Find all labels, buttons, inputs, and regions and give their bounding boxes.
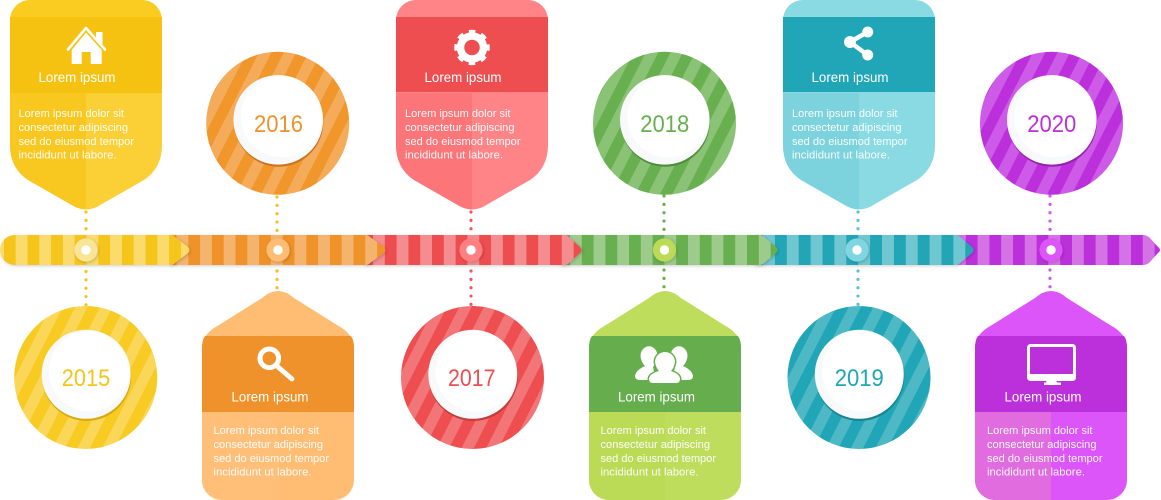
disc highlight bbox=[1014, 76, 1095, 157]
year label: 2018 bbox=[640, 111, 689, 138]
disc highlight bbox=[822, 331, 903, 412]
icon: share bbox=[844, 26, 873, 60]
left half shade bbox=[396, 93, 472, 210]
connector 2018 bbox=[662, 196, 666, 288]
year badge 2019 bbox=[788, 306, 930, 449]
card title: Lorem ipsum bbox=[38, 69, 116, 85]
header band bbox=[396, 17, 548, 92]
year label: 2015 bbox=[62, 365, 110, 392]
panel: card green (bottom) bbox=[589, 291, 741, 500]
card body text: sed do eiusmod tempor bbox=[18, 136, 134, 148]
card body text bbox=[405, 108, 521, 162]
card shape bbox=[783, 0, 935, 210]
year label: 2020 bbox=[1027, 111, 1076, 138]
left half shade bbox=[10, 93, 86, 210]
ring inner shadow bbox=[621, 78, 710, 167]
left half shade bbox=[975, 412, 1051, 500]
card body text bbox=[214, 425, 329, 478]
disc highlight bbox=[241, 76, 322, 157]
card body text: incididunt ut labore. bbox=[600, 466, 698, 478]
ring inner shadow bbox=[815, 332, 904, 421]
card title: Lorem ipsum bbox=[618, 388, 695, 404]
card body text: Lorem ipsum dolor sit bbox=[987, 425, 1092, 437]
card body text: incididunt ut labore. bbox=[405, 150, 503, 162]
ring inner shadow bbox=[42, 332, 131, 421]
timeline bar bbox=[0, 235, 1160, 265]
white disc bbox=[1007, 75, 1097, 165]
card body text: incididunt ut labore. bbox=[792, 150, 890, 162]
disc highlight bbox=[436, 331, 516, 412]
icon: house bbox=[68, 28, 105, 64]
header band bbox=[10, 17, 162, 93]
panel: card yellow (top) bbox=[10, 0, 162, 210]
card body text: Lorem ipsum dolor sit bbox=[214, 425, 319, 437]
card body text: Lorem ipsum dolor sit bbox=[405, 108, 510, 120]
panel: card red (top) bbox=[396, 0, 548, 210]
year badge 2015 bbox=[14, 306, 157, 449]
connector 2016 bbox=[275, 197, 279, 288]
connector 2019 bbox=[856, 212, 860, 305]
card shape bbox=[589, 291, 741, 500]
marker 2020 bbox=[1039, 238, 1063, 262]
card shape bbox=[10, 0, 162, 210]
header band bbox=[975, 336, 1127, 412]
card shape bbox=[975, 291, 1127, 500]
card body text: sed do eiusmod tempor bbox=[405, 136, 521, 148]
year badge 2017 bbox=[401, 306, 544, 449]
card body text bbox=[600, 425, 716, 478]
year label: 2019 bbox=[835, 365, 884, 392]
striped ring bbox=[14, 306, 157, 449]
white disc bbox=[815, 330, 904, 419]
striped ring bbox=[206, 52, 349, 195]
card body text: consectetur adipiscing bbox=[792, 122, 901, 134]
icon: monitor bbox=[1028, 346, 1075, 385]
bar segment: 2018 green arrow bbox=[560, 235, 778, 265]
bar segment: 2016 orange arrow bbox=[170, 235, 386, 265]
bar segment: 2015 yellow arrow bbox=[0, 235, 190, 265]
ring inner shadow bbox=[1008, 78, 1097, 167]
card body text: sed do eiusmod tempor bbox=[987, 453, 1103, 465]
card body text: incididunt ut labore. bbox=[214, 466, 312, 478]
header band bbox=[589, 336, 741, 412]
card body text: consectetur adipiscing bbox=[600, 439, 710, 451]
card body text: consectetur adipiscing bbox=[214, 439, 323, 451]
card body text: sed do eiusmod tempor bbox=[214, 453, 329, 465]
card title: Lorem ipsum bbox=[232, 388, 308, 404]
connector 2017 bbox=[469, 212, 473, 305]
dotted connectors bbox=[86, 196, 1050, 306]
white disc bbox=[42, 330, 131, 419]
bar segment: 2019 teal arrow bbox=[755, 235, 974, 265]
year label: 2017 bbox=[448, 365, 496, 392]
timeline markers bbox=[74, 238, 1063, 262]
card shape bbox=[396, 0, 548, 210]
left half shade bbox=[783, 93, 859, 210]
striped ring bbox=[401, 306, 544, 449]
card title: Lorem ipsum bbox=[1004, 388, 1082, 404]
bar segment: 2017 red arrow bbox=[365, 235, 582, 265]
card shape bbox=[202, 291, 354, 500]
header band bbox=[202, 336, 354, 412]
card body text bbox=[987, 425, 1103, 478]
panel: card teal (top) bbox=[783, 0, 935, 210]
icon: magnifier bbox=[260, 349, 292, 379]
card body text: incididunt ut labore. bbox=[987, 466, 1085, 478]
panel: card orange (bottom) bbox=[202, 291, 354, 500]
card body text: sed do eiusmod tempor bbox=[600, 453, 716, 465]
card title: Lorem ipsum bbox=[424, 69, 502, 85]
bar segment: 2020 purple arrow bbox=[950, 235, 1160, 265]
card body text: Lorem ipsum dolor sit bbox=[18, 108, 124, 120]
striped ring bbox=[980, 52, 1123, 195]
ring inner shadow bbox=[429, 332, 518, 421]
marker 2017 bbox=[459, 238, 483, 262]
marker 2016 bbox=[266, 238, 290, 262]
white disc bbox=[620, 75, 710, 165]
year badge 2018 bbox=[593, 52, 736, 195]
year badge 2016 bbox=[206, 52, 349, 195]
white disc bbox=[233, 75, 323, 165]
striped ring bbox=[788, 306, 930, 449]
marker 2019 bbox=[845, 238, 869, 262]
ring inner shadow bbox=[234, 78, 323, 167]
card body text: consectetur adipiscing bbox=[405, 122, 514, 134]
card title: Lorem ipsum bbox=[812, 69, 888, 85]
icon: people group bbox=[635, 346, 693, 383]
disc highlight bbox=[627, 76, 708, 157]
connector 2020 bbox=[1048, 196, 1052, 288]
card body text bbox=[18, 108, 134, 162]
year label: 2016 bbox=[254, 111, 303, 138]
card body text: incididunt ut labore. bbox=[18, 150, 116, 162]
striped ring bbox=[593, 52, 736, 195]
top cap bbox=[10, 0, 162, 17]
year badge 2020 bbox=[980, 52, 1123, 195]
card body text: Lorem ipsum dolor sit bbox=[792, 108, 898, 120]
marker 2018 bbox=[653, 238, 676, 262]
marker 2015 bbox=[74, 238, 98, 262]
card body text: Lorem ipsum dolor sit bbox=[600, 425, 706, 437]
disc highlight bbox=[49, 331, 130, 412]
left half shade bbox=[589, 412, 665, 500]
card body text bbox=[792, 108, 908, 162]
connector 2015 bbox=[84, 212, 88, 306]
card body text: consectetur adipiscing bbox=[18, 122, 128, 134]
header band bbox=[783, 17, 935, 92]
left half shade bbox=[202, 412, 278, 500]
panel: card purple (bottom) bbox=[975, 291, 1127, 500]
card body text: consectetur adipiscing bbox=[987, 439, 1096, 451]
icon: gear bbox=[457, 32, 487, 62]
card body text: sed do eiusmod tempor bbox=[792, 136, 908, 148]
white disc bbox=[428, 330, 517, 419]
